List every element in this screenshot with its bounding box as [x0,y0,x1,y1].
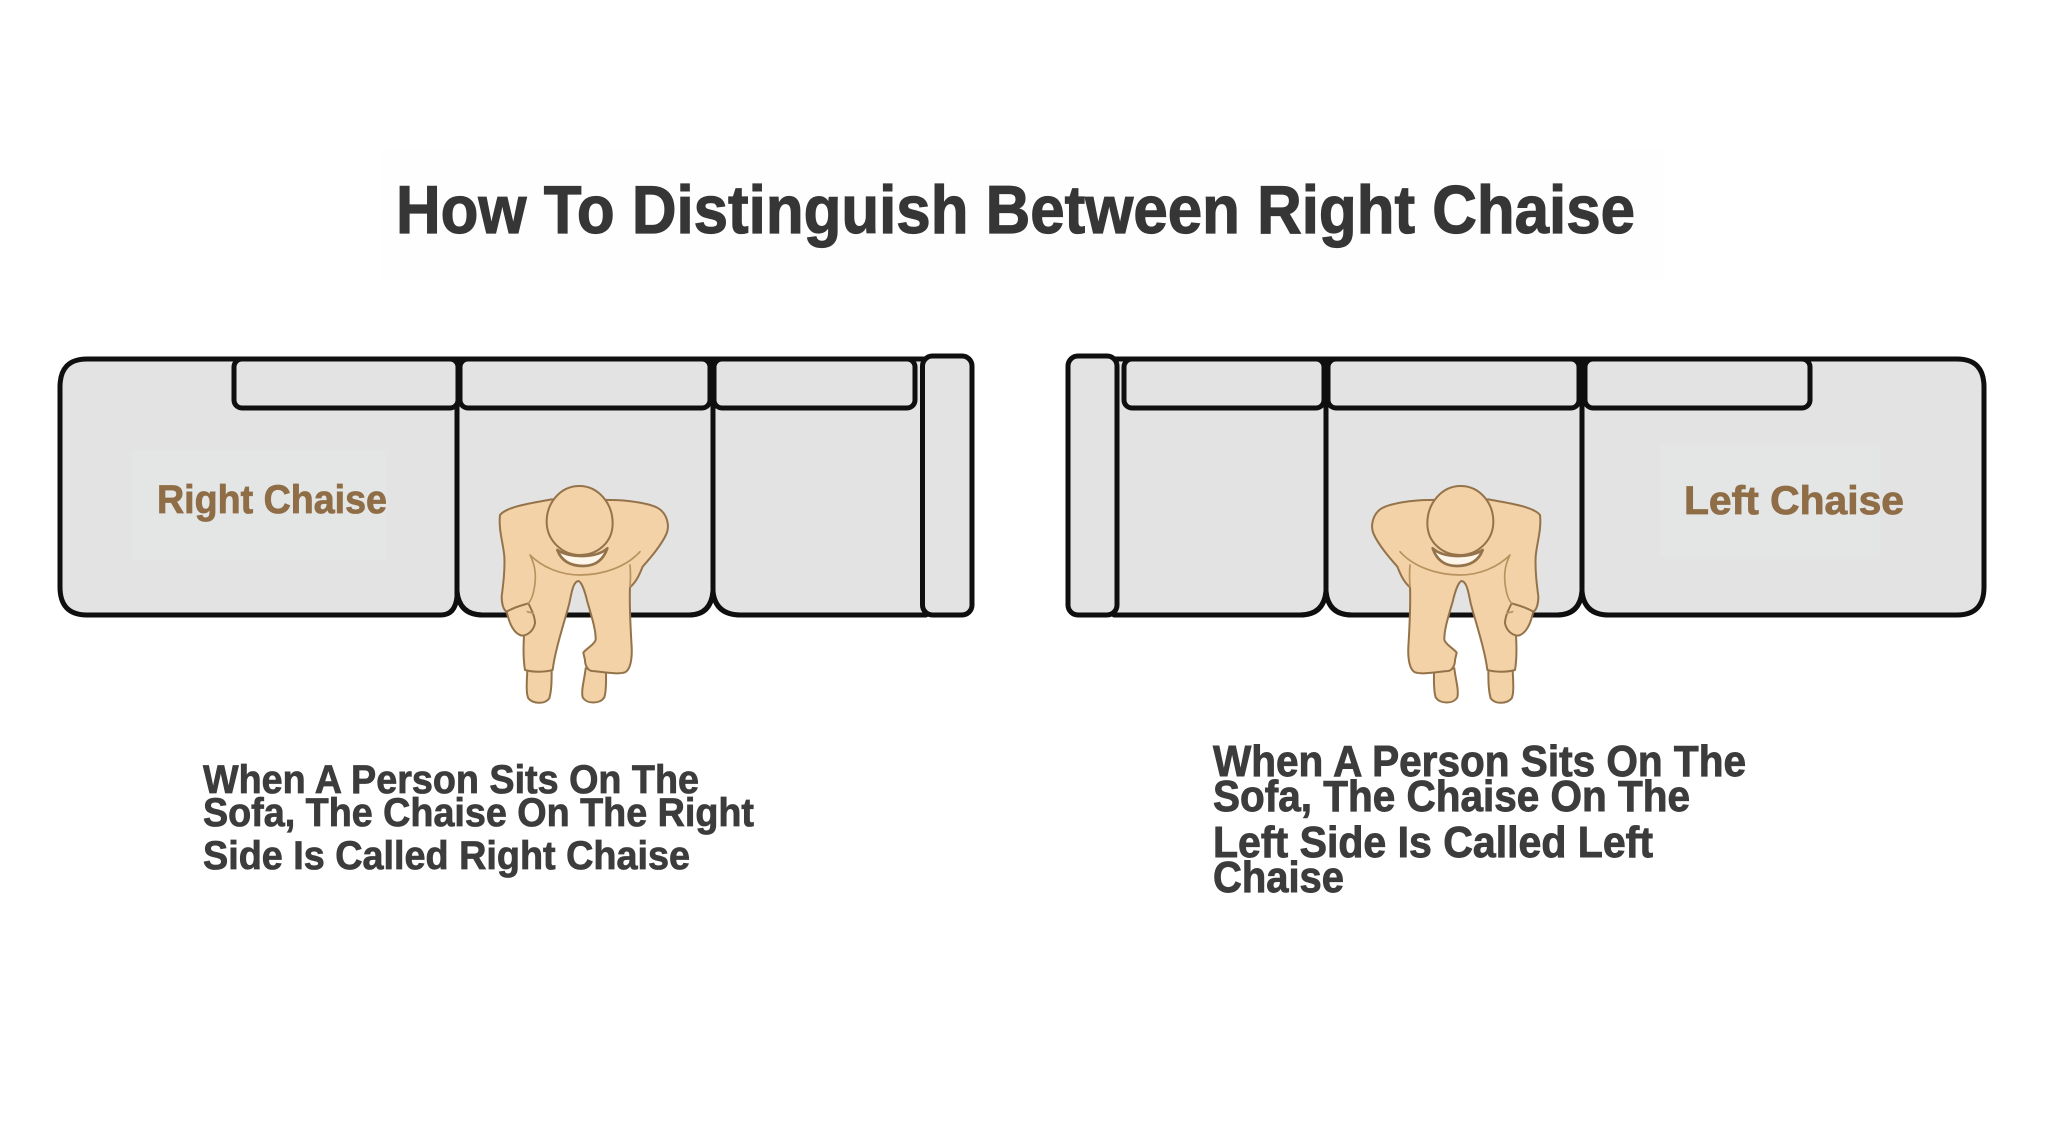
text block: right chaise: When A Person Sits On The [203,758,699,802]
back cushion 1 [1124,359,1324,408]
sofa: right chaise [60,356,972,615]
text block: right chaise [203,758,754,878]
head [547,486,613,555]
chaise seat [1582,359,1984,615]
torso and legs [1372,499,1540,673]
head [1427,486,1493,555]
collar [1433,548,1483,566]
foot right [582,668,606,703]
sofa: left chaise [1068,356,1984,615]
label: right chaise: Right Chaise [157,478,387,522]
collar [557,548,607,566]
chaise seat [60,359,457,615]
middle seat [1326,359,1582,615]
torso and legs [500,499,668,673]
middle seat [457,359,713,615]
foot left [527,670,552,703]
back cushion 2 [1328,359,1579,408]
text block: right chaise: Side Is Called Right Chaise [203,834,690,878]
text block: left chaise [1213,737,1746,902]
text block: right chaise: Sofa, The Chaise On The Right [203,791,754,835]
text block: left chaise: Left Side Is Called Left [1213,818,1653,867]
text block: left chaise: Sofa, The Chaise On The [1213,772,1690,821]
text block: left chaise: When A Person Sits On The [1213,737,1746,786]
back cushion 1 [234,359,458,408]
back cushion 3 [1585,359,1810,408]
person: right figure [1372,486,1540,703]
back cushion 2 [460,359,710,408]
end seat [1114,359,1326,615]
label: left chaise: Left Chaise [1684,479,1904,523]
arm and chest lines [527,552,640,613]
arm rest [1068,356,1117,615]
foot left [1488,670,1513,703]
text block: left chaise: Chaise [1213,853,1344,902]
foot right [1434,668,1458,703]
hand [1505,603,1533,636]
hand [507,603,535,636]
arm rest [922,356,972,615]
arm and chest lines [1400,552,1513,613]
back cushion 3 [714,359,915,408]
title: How To Distinguish Between Right Chaise [396,172,1635,248]
end seat [713,359,926,615]
person: left figure [500,486,668,703]
